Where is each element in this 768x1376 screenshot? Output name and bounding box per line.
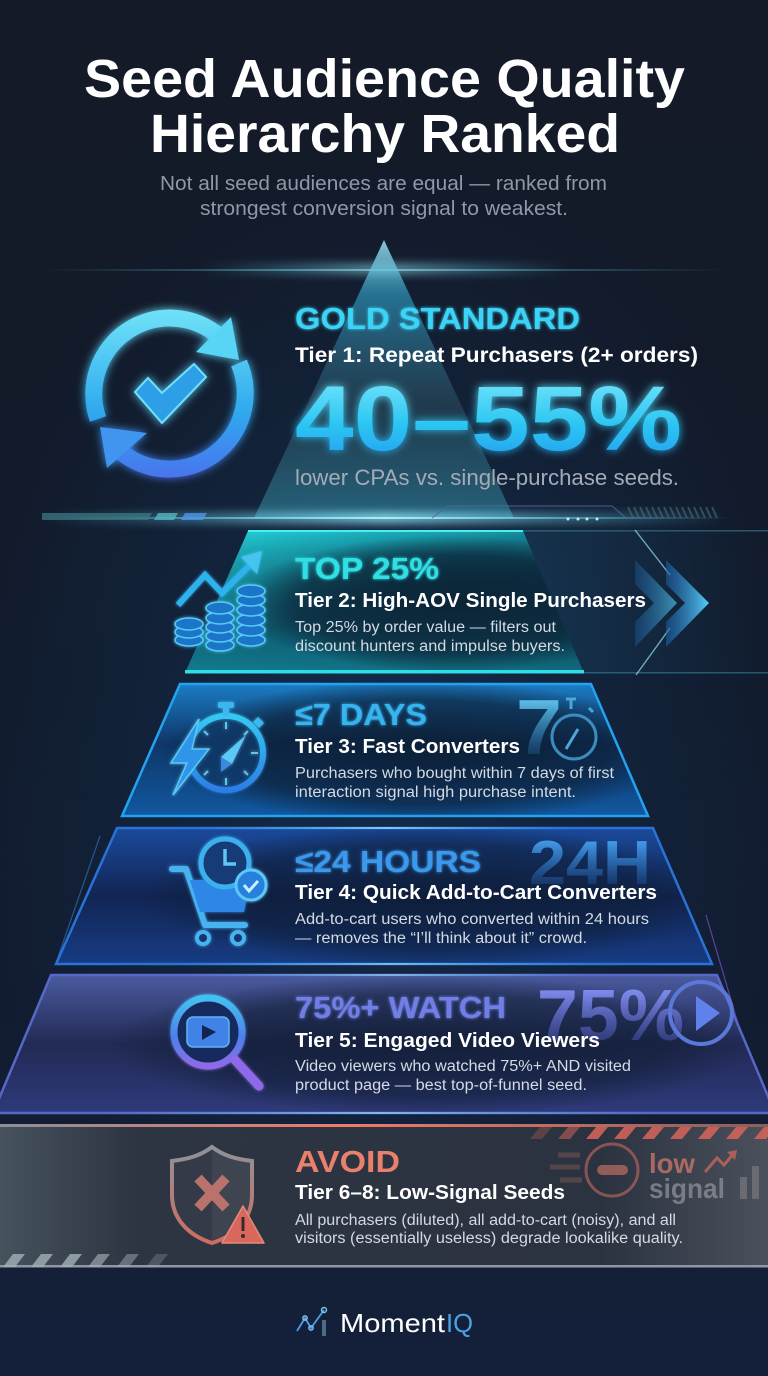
avoid text: AVOID <box>295 1144 400 1179</box>
tier 2 text: TOP 25% <box>295 551 439 586</box>
avoid text: All purchasers (diluted), all add-to-cart (noisy), and all <box>295 1212 676 1229</box>
watermark: 7 with stopwatch <box>516 683 596 771</box>
tier 5 text: Tier 5: Engaged Video Viewers <box>295 1029 600 1052</box>
title: Seed Audience Quality <box>84 49 685 109</box>
watermark: low signal <box>550 1144 759 1204</box>
tier 3 text: Purchasers who bought within 7 days of first <box>295 765 615 782</box>
icon: stopwatch with lightning <box>171 702 264 795</box>
tier 1 text <box>295 301 698 490</box>
tier 1 text: GOLD STANDARD <box>295 301 580 336</box>
tier 3 text: interaction signal high purchase intent. <box>295 784 576 801</box>
tier 1 text: lower CPAs vs. single-purchase seeds. <box>295 465 679 490</box>
icon: repeat cycle with check <box>94 317 245 469</box>
subtitle: strongest conversion signal to weakest. <box>200 198 568 220</box>
tier 4 text: — removes the “I’ll think about it” crowd. <box>295 930 587 947</box>
tier 2 text: Top 25% by order value — filters out <box>295 619 557 636</box>
tier 1 text: Tier 1: Repeat Purchasers (2+ orders) <box>295 344 698 367</box>
logo: MomentIQ: IQ <box>446 1308 473 1338</box>
tier 2 text: discount hunters and impulse buyers. <box>295 638 565 655</box>
panel: tier 4 <box>56 824 720 968</box>
panel: tier 5 <box>0 915 768 1115</box>
panel: tier 1 pyramid apex <box>40 240 730 524</box>
tier 1 text: 40–55% <box>295 368 682 470</box>
watermark: 24H: 24H <box>529 829 651 898</box>
logo: MomentIQ: Moment <box>340 1308 446 1338</box>
logo: MomentIQ <box>297 1308 473 1338</box>
icon: magnifier with video <box>174 998 259 1086</box>
tier 5 text: Video viewers who watched 75%+ AND visited <box>295 1058 631 1075</box>
watermark: 7 with stopwatch: 7 <box>516 683 562 771</box>
title: Hierarchy Ranked <box>150 104 620 164</box>
tier 4 text: Add-to-cart users who converted within 24 hours <box>295 911 649 928</box>
tier 4 text <box>295 844 657 947</box>
tier 2 text: Tier 2: High-AOV Single Purchasers <box>295 589 646 612</box>
watermark: 75% with play button: 75% <box>537 976 684 1056</box>
tier 5 text <box>295 990 631 1094</box>
icon: coins and rising arrow <box>175 551 265 651</box>
title <box>84 49 685 164</box>
tier 3 text: ≤7 DAYS <box>295 697 427 732</box>
tier 4 text: Tier 4: Quick Add-to-Cart Converters <box>295 881 657 904</box>
watermark: low signal: signal <box>649 1173 725 1204</box>
panel: tier 2 <box>185 530 768 675</box>
avoid text <box>295 1144 683 1247</box>
panel: tier 3 <box>120 682 650 818</box>
subtitle <box>160 173 607 220</box>
avoid text: Tier 6–8: Low-Signal Seeds <box>295 1181 565 1204</box>
avoid text: visitors (essentially useless) degrade lookalike quality. <box>295 1230 683 1247</box>
icon: cart with clock <box>172 839 266 944</box>
tier 3 text <box>295 697 615 801</box>
tier 3 text: Tier 3: Fast Converters <box>295 735 520 758</box>
tier 2 text <box>295 551 646 655</box>
panel: avoid tier <box>0 1124 768 1268</box>
watermark: low signal: low <box>649 1148 695 1179</box>
subtitle: Not all seed audiences are equal — ranked from <box>160 173 607 195</box>
icon: shield with X and warning <box>172 1147 264 1243</box>
tier 4 text: ≤24 HOURS <box>295 844 481 879</box>
tier 5 text: 75%+ WATCH <box>295 990 506 1025</box>
tier 5 text: product page — best top-of-funnel seed. <box>295 1077 587 1094</box>
